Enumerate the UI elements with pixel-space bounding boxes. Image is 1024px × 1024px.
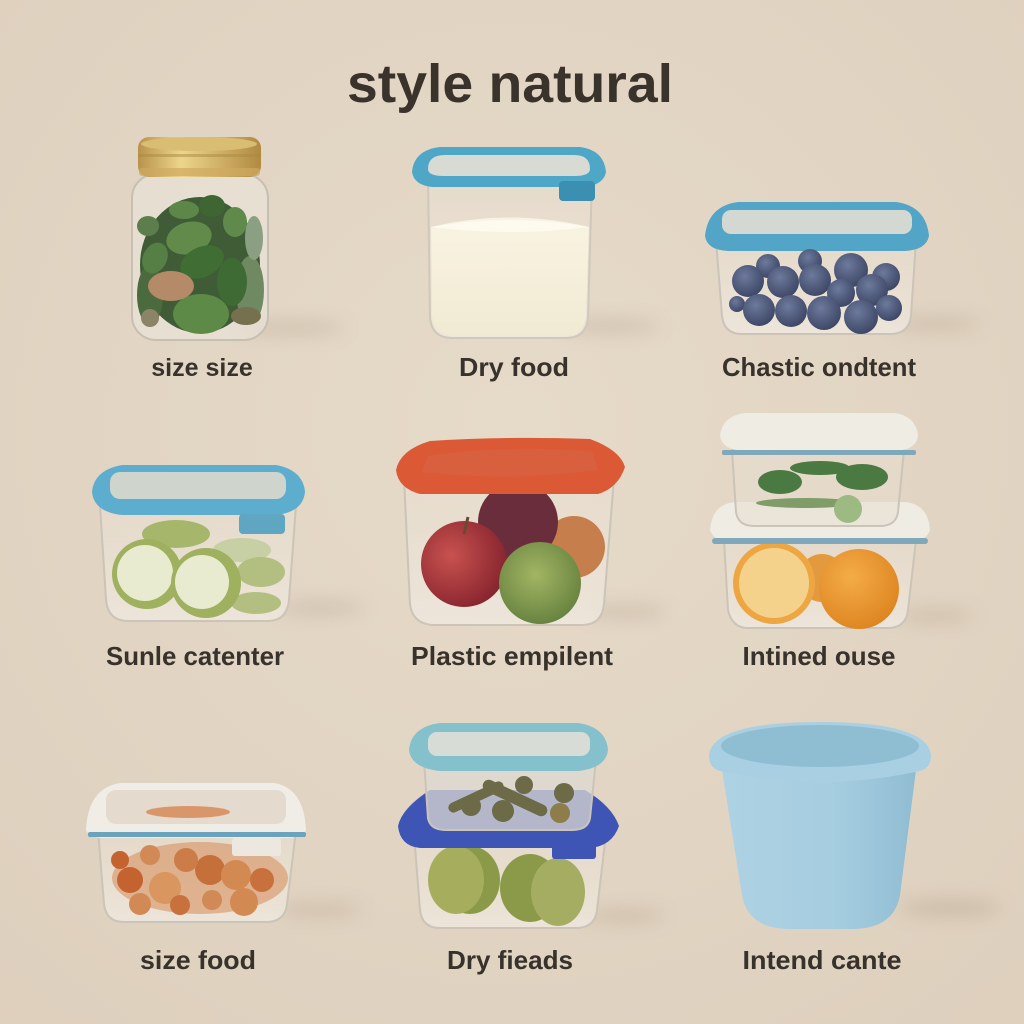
- label: Plastic empilent: [411, 641, 613, 671]
- label: Intined ouse: [742, 641, 896, 671]
- label: Intend cante: [742, 945, 902, 975]
- label: Chastic ondtent: [722, 352, 916, 382]
- item: blueberries container: [705, 202, 980, 334]
- berries: [729, 249, 902, 334]
- label: size size: [151, 354, 253, 382]
- gold lid: [138, 137, 261, 177]
- lid: [92, 465, 305, 515]
- item: stacked white-lid containers: [710, 413, 973, 629]
- lid: [705, 202, 929, 251]
- apricots: [111, 842, 288, 916]
- bottom box: [414, 834, 606, 928]
- lid: [412, 147, 606, 187]
- fruit: [421, 482, 605, 624]
- title: style natural: [347, 54, 673, 114]
- item: blue cup: [709, 722, 1002, 929]
- label: Sunle catenter: [106, 641, 284, 671]
- item: glass jar with leaves: [132, 137, 345, 340]
- top box: [732, 450, 904, 526]
- top box: [424, 760, 596, 830]
- label: size food: [140, 945, 256, 975]
- item: stacked kiwi and beans containers: [398, 723, 665, 928]
- bottom box: [724, 540, 916, 628]
- item: cucumber container: [92, 465, 365, 621]
- leaves: [137, 195, 264, 334]
- label: Dry fieads: [447, 945, 573, 975]
- label: Dry food: [459, 352, 569, 382]
- item: fruit container with red lid: [396, 438, 667, 625]
- lid: [396, 438, 625, 494]
- lid: [86, 783, 306, 838]
- item: milk container: [412, 147, 660, 338]
- cucumber slices: [112, 520, 285, 618]
- item: apricot container: [86, 783, 362, 922]
